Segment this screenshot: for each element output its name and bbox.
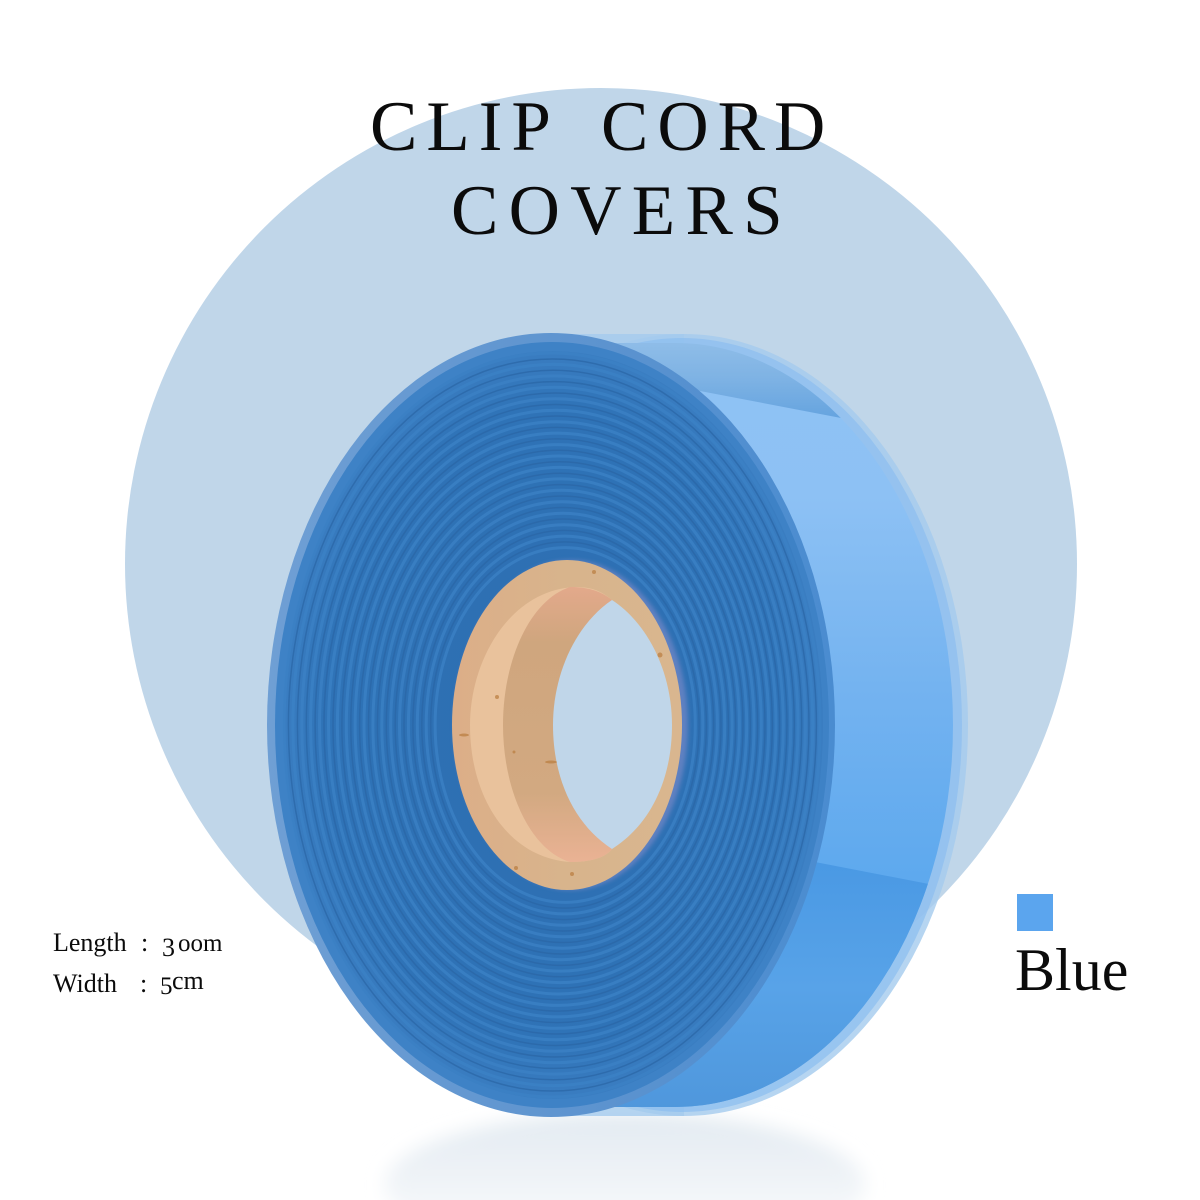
width spec: Width (53, 969, 117, 998)
specifications text (53, 928, 222, 1000)
specifications text: : (140, 969, 147, 998)
specifications text: 3 (162, 933, 175, 962)
through hole showing the background (553, 600, 672, 849)
title line 2: COVERS (451, 172, 793, 250)
illustration: tape roll on a pale blue circle (125, 88, 1077, 1200)
floor reflection (385, 1113, 865, 1200)
specifications text: cm (172, 966, 204, 995)
cardboard core (452, 560, 688, 890)
concentric tape windings (284, 353, 820, 1097)
specifications text: 5 (160, 973, 172, 1000)
colour label: Blue (1015, 937, 1128, 1003)
length spec (53, 928, 222, 962)
title (370, 88, 834, 250)
background circle (125, 88, 1077, 1040)
width spec (53, 966, 204, 1000)
length spec: Length (53, 928, 127, 957)
specifications text: : (141, 928, 148, 957)
tape side band (572, 334, 968, 1116)
tape front face (267, 333, 835, 1117)
colour swatch (1017, 894, 1053, 931)
title line 1: CLIP CORD (370, 88, 834, 166)
specifications text: oom (178, 930, 222, 957)
